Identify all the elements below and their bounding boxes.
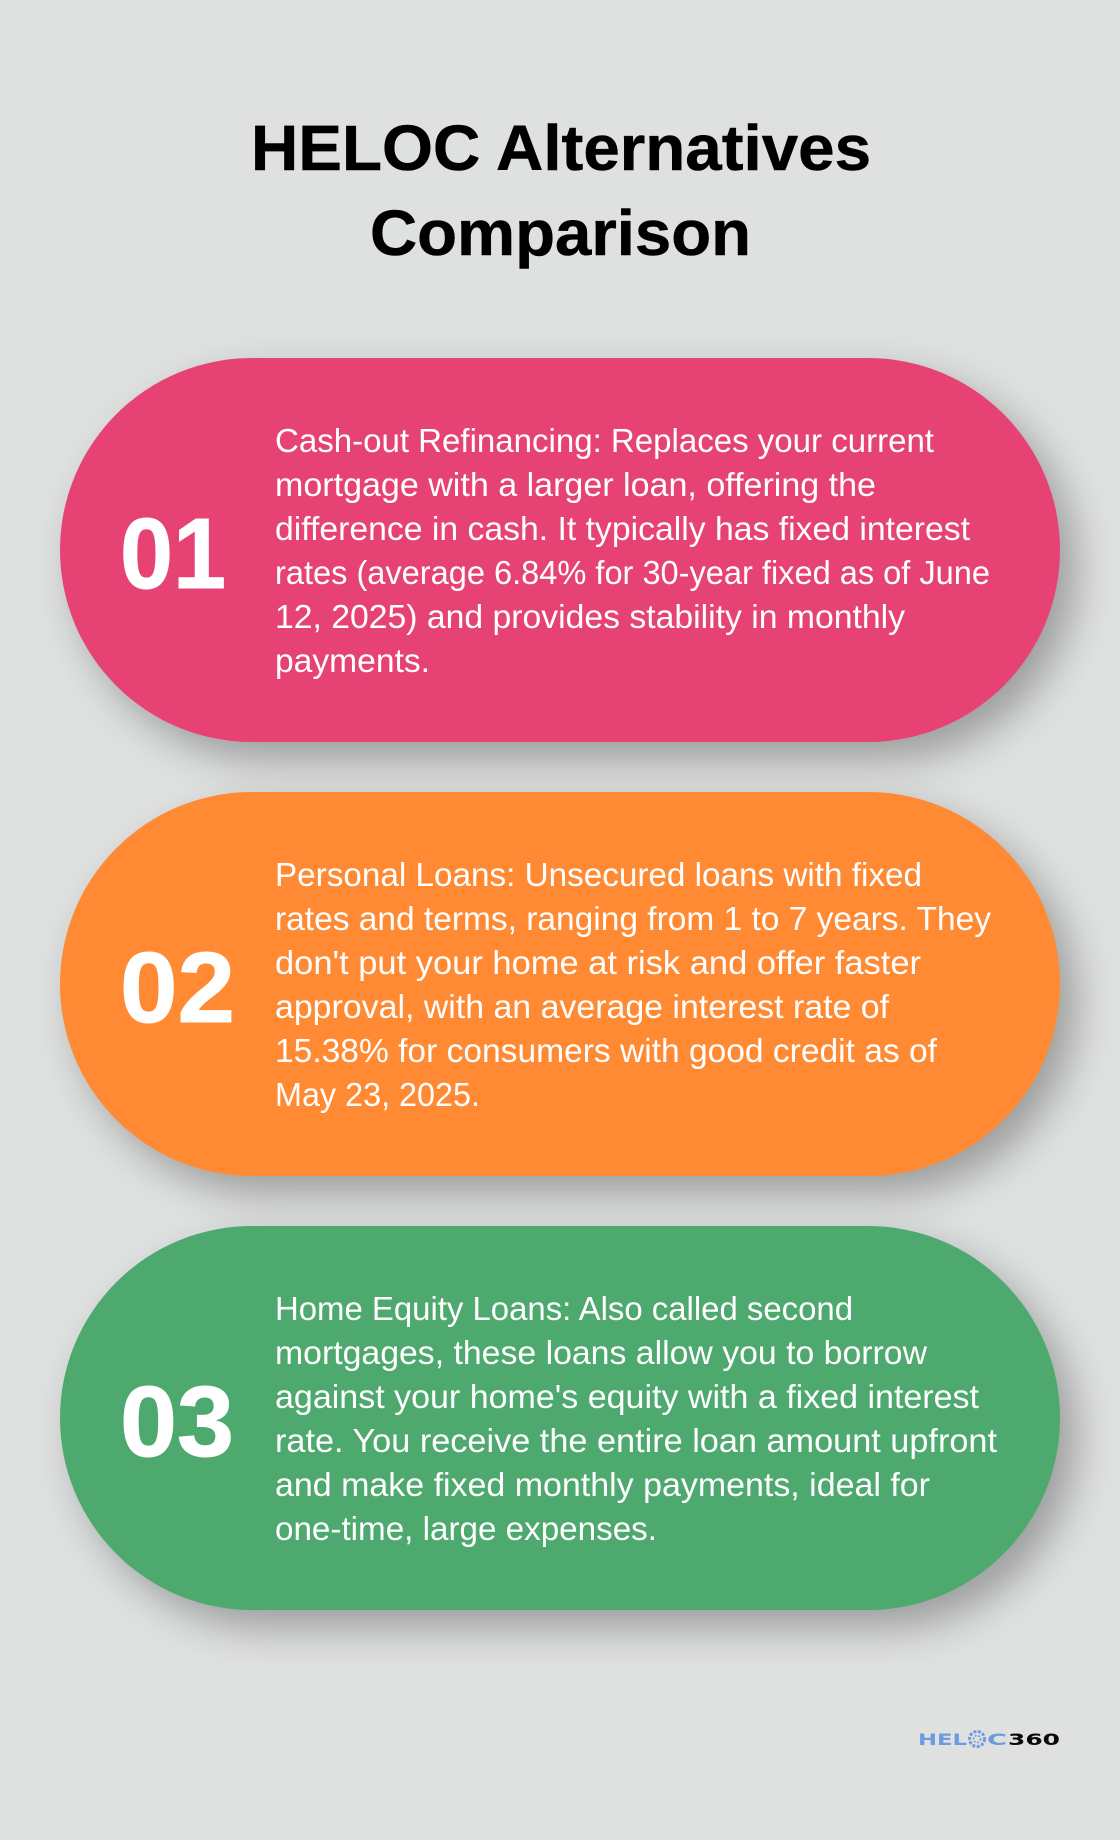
text: home equity loans description: and make fixed monthly payments, ideal for bbox=[275, 1466, 930, 1503]
number 03: 03 bbox=[120, 1366, 234, 1478]
text: home equity loans description: Home Equity Loans: Also called second bbox=[275, 1290, 853, 1327]
text: home equity loans description bbox=[275, 1290, 997, 1547]
number 01: 01 bbox=[120, 498, 226, 610]
text: cash-out refinancing description: mortgage with a larger loan, offering the bbox=[275, 466, 876, 503]
panel: home equity loans bbox=[60, 1226, 1060, 1610]
title: Comparison bbox=[370, 197, 751, 269]
text: personal loans description: 15.38% for consumers with good credit as of bbox=[275, 1032, 938, 1069]
text: cash-out refinancing description: difference in cash. It typically has fixed interest bbox=[275, 510, 970, 547]
logo: HELOC360 bbox=[918, 1730, 1060, 1749]
logo: HELOC360: C bbox=[987, 1730, 1007, 1749]
number 02: 02 bbox=[120, 932, 235, 1044]
panel: cash-out refinancing bbox=[60, 358, 1060, 742]
logo: HELOC360: HEL bbox=[918, 1730, 967, 1749]
text: personal loans description: May 23, 2025. bbox=[275, 1076, 480, 1113]
text: cash-out refinancing description: 12, 2025) and provides stability in monthly bbox=[275, 598, 906, 635]
text: personal loans description: approval, with an average interest rate of bbox=[275, 988, 890, 1025]
text: home equity loans description: one-time, large expenses. bbox=[275, 1510, 657, 1547]
text: home equity loans description: mortgages, these loans allow you to borrow bbox=[275, 1334, 927, 1371]
text: cash-out refinancing description: payments. bbox=[275, 642, 430, 679]
text: cash-out refinancing description: Cash-out Refinancing: Replaces your current bbox=[275, 422, 934, 459]
text: home equity loans description: rate. You receive the entire loan amount upfront bbox=[275, 1422, 997, 1459]
logo: HELOC360: 360 bbox=[1008, 1730, 1060, 1749]
text: cash-out refinancing description: rates (average 6.84% for 30-year fixed as of June bbox=[275, 554, 990, 591]
text: personal loans description: rates and terms, ranging from 1 to 7 years. They bbox=[275, 900, 991, 937]
icon: swirl O bbox=[970, 1732, 984, 1746]
text: personal loans description bbox=[275, 856, 991, 1113]
title: HELOC Alternatives bbox=[251, 112, 871, 184]
title bbox=[251, 112, 871, 269]
text: personal loans description: Personal Loans: Unsecured loans with fixed bbox=[275, 856, 922, 893]
panel: personal loans bbox=[60, 792, 1060, 1176]
text: home equity loans description: against your home's equity with a fixed interest bbox=[275, 1378, 979, 1415]
text: cash-out refinancing description bbox=[275, 422, 990, 679]
text: personal loans description: don't put your home at risk and offer faster bbox=[275, 944, 921, 981]
